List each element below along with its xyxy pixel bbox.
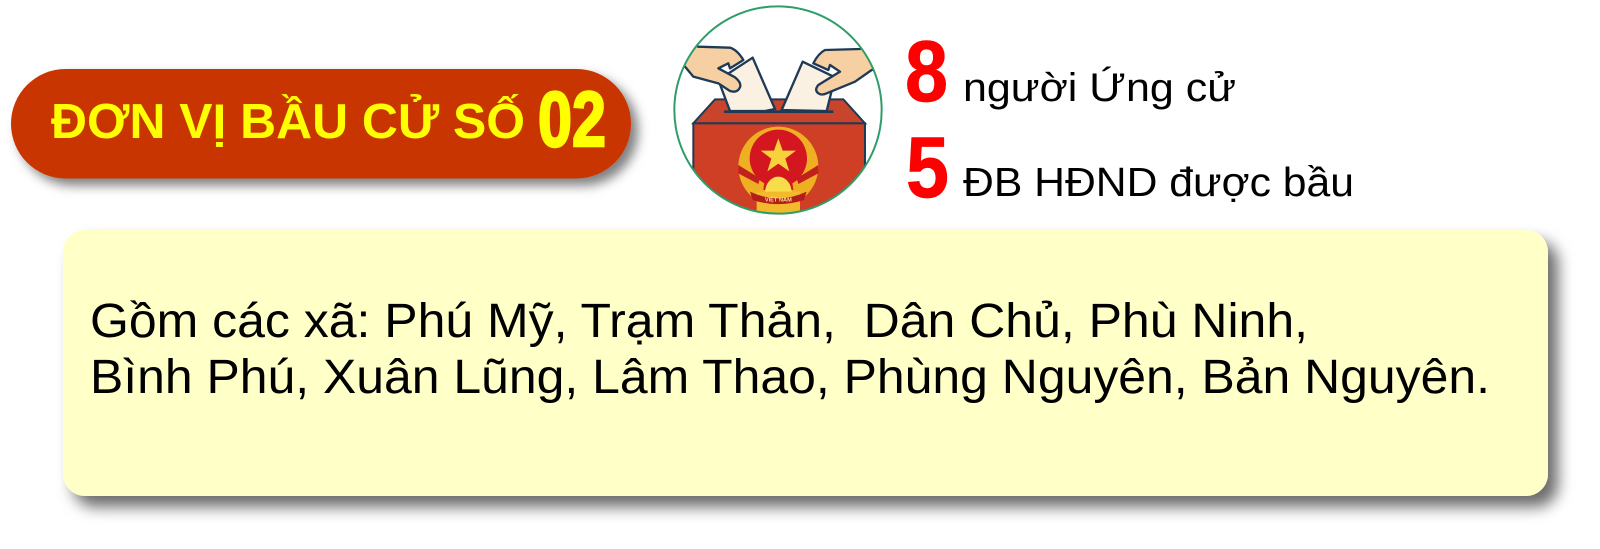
label candidates: người Ứng cử	[963, 65, 1236, 110]
left hand	[684, 45, 744, 93]
slot	[724, 110, 833, 113]
right hand	[812, 48, 873, 96]
title banner	[11, 69, 631, 178]
state emblem	[738, 127, 818, 215]
ballot paper left	[718, 58, 775, 111]
box front	[692, 122, 866, 210]
stat: elected delegates	[906, 120, 1354, 216]
commune list text	[90, 295, 1490, 404]
icon: ballot box with state emblem	[670, 6, 890, 223]
emblem ribbon text: VIỆT NAM	[765, 195, 792, 203]
box lid	[693, 99, 865, 123]
panel background	[63, 230, 1548, 496]
stat: candidates	[905, 24, 1236, 120]
banner number: 02	[538, 75, 606, 163]
number 5: 5	[906, 120, 949, 216]
ballot paper right	[782, 62, 835, 111]
line 2: Bình Phú, Xuân Lũng, Lâm Thao, Phùng Nguyên, Bản Nguyên.	[90, 351, 1490, 404]
banner heading text: ĐƠN VỊ BẦU CỬ SỐ	[51, 94, 525, 149]
line 1: Gồm các xã: Phú Mỹ, Trạm Thản, Dân Chủ, Phù Ninh,	[90, 295, 1308, 348]
panel: communes	[63, 230, 1548, 496]
banner pill	[11, 69, 631, 178]
number 8: 8	[905, 24, 948, 120]
label delegates: ĐB HĐND được bầu	[963, 159, 1354, 205]
